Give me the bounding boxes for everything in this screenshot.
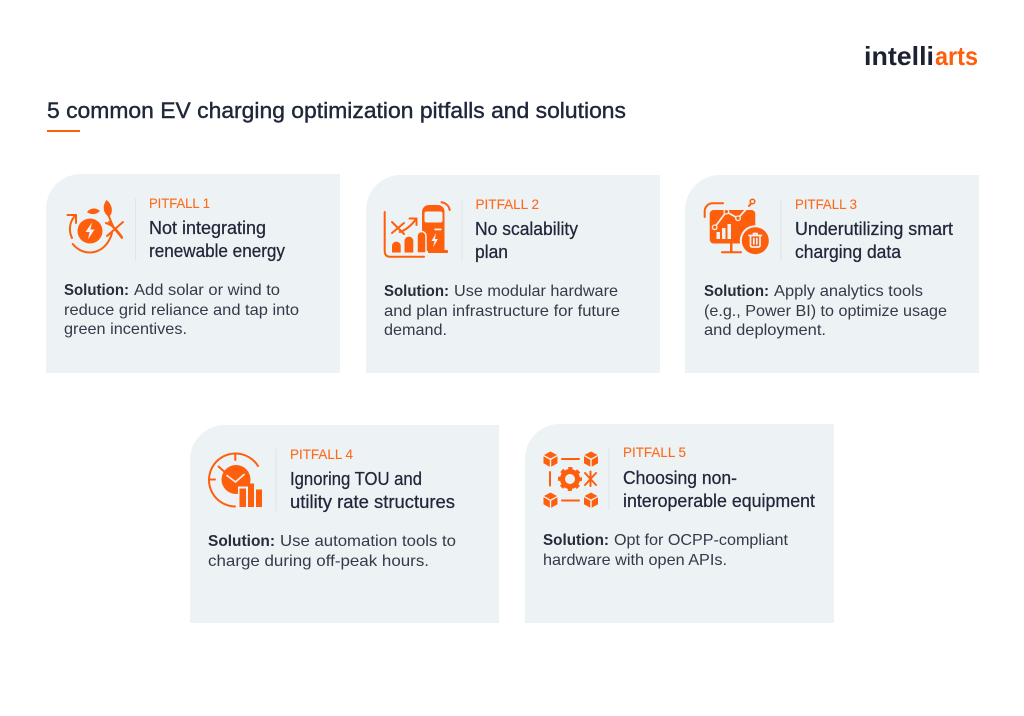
heading: pitfall 2: plan <box>475 242 508 262</box>
panel: pitfall 4 <box>190 425 499 623</box>
solution text: pitfall 2: and plan infrastructure for future <box>384 303 620 320</box>
solution text: pitfall 2 <box>384 283 620 339</box>
heading: pitfall 1 <box>149 218 285 261</box>
heading: pitfall 5: Choosing non- <box>623 468 737 488</box>
label: pitfall 3: PITFALL 3 <box>795 196 857 212</box>
heading: pitfall 4: Ignoring TOU and <box>290 469 422 489</box>
solution text: pitfall 4: Solution: <box>208 533 275 550</box>
heading: pitfall 1: Not integrating <box>149 218 266 238</box>
solution text: pitfall 4: Use automation tools to <box>280 533 456 550</box>
solution text: pitfall 1 <box>64 282 299 338</box>
label: pitfall 2: PITFALL 2 <box>476 196 539 212</box>
solution text: pitfall 5: Opt for OCPP-compliant <box>614 532 789 549</box>
icon: charger scalability <box>385 202 450 257</box>
solution text: pitfall 3: and deployment. <box>704 322 826 339</box>
logo: intelliarts <box>864 41 978 71</box>
heading: pitfall 1: renewable energy <box>149 241 285 261</box>
logo: intelliarts: arts <box>935 41 978 71</box>
logo: intelliarts: intelli <box>864 41 934 71</box>
solution text: pitfall 2: Solution: <box>384 283 449 300</box>
heading: pitfall 3 <box>795 219 953 262</box>
solution text: pitfall 3: (e.g., Power BI) to optimize usage <box>704 303 947 320</box>
divider <box>134 198 136 260</box>
panel: pitfall 2 <box>366 175 660 373</box>
heading: pitfall 2: No scalability <box>475 219 578 239</box>
icon: interoperable network <box>544 452 598 508</box>
label: pitfall 5: PITFALL 5 <box>623 444 686 460</box>
heading: pitfall 5: interoperable equipment <box>623 491 815 511</box>
heading: pitfall 3: Underutilizing smart <box>795 219 953 239</box>
heading: pitfall 2 <box>475 219 578 262</box>
solution text: pitfall 1: Solution: <box>64 282 129 299</box>
label: pitfall 4: PITFALL 4 <box>290 446 353 462</box>
divider <box>275 449 277 511</box>
solution text: pitfall 5: hardware with open APIs. <box>543 552 727 569</box>
icon: clock with bars <box>209 454 264 508</box>
solution text: pitfall 4: charge during off-peak hours. <box>208 553 429 570</box>
solution text: pitfall 3 <box>704 283 947 339</box>
title: 5 common EV charging optimization pitfalls and solutions <box>47 98 626 123</box>
panel: pitfall 1 <box>46 174 340 373</box>
icon: renewable energy <box>68 200 123 253</box>
solution text: pitfall 1: reduce grid reliance and tap into <box>64 302 299 319</box>
label: pitfall 1: PITFALL 1 <box>149 195 210 211</box>
divider <box>608 448 610 510</box>
panel: pitfall 3 <box>685 175 979 373</box>
heading: pitfall 4: utility rate structures <box>290 492 455 512</box>
solution text: pitfall 5 <box>543 532 789 569</box>
solution text: pitfall 4 <box>208 533 456 570</box>
solution text: pitfall 2: demand. <box>384 322 447 339</box>
heading: pitfall 3: charging data <box>795 242 902 262</box>
solution text: pitfall 3: Solution: <box>704 283 769 300</box>
solution text: pitfall 1: Add solar or wind to <box>134 282 280 299</box>
heading: pitfall 4 <box>290 469 455 512</box>
icon: analytics monitor with bin <box>705 199 771 256</box>
solution text: pitfall 5: Solution: <box>543 532 609 549</box>
solution text: pitfall 1: green incentives. <box>64 321 187 338</box>
solution text: pitfall 3: Apply analytics tools <box>774 283 923 300</box>
panel: pitfall 5 <box>525 424 834 623</box>
divider <box>461 199 463 261</box>
solution text: pitfall 2: Use modular hardware <box>454 283 618 300</box>
heading: pitfall 5 <box>623 468 815 511</box>
divider <box>780 199 782 261</box>
